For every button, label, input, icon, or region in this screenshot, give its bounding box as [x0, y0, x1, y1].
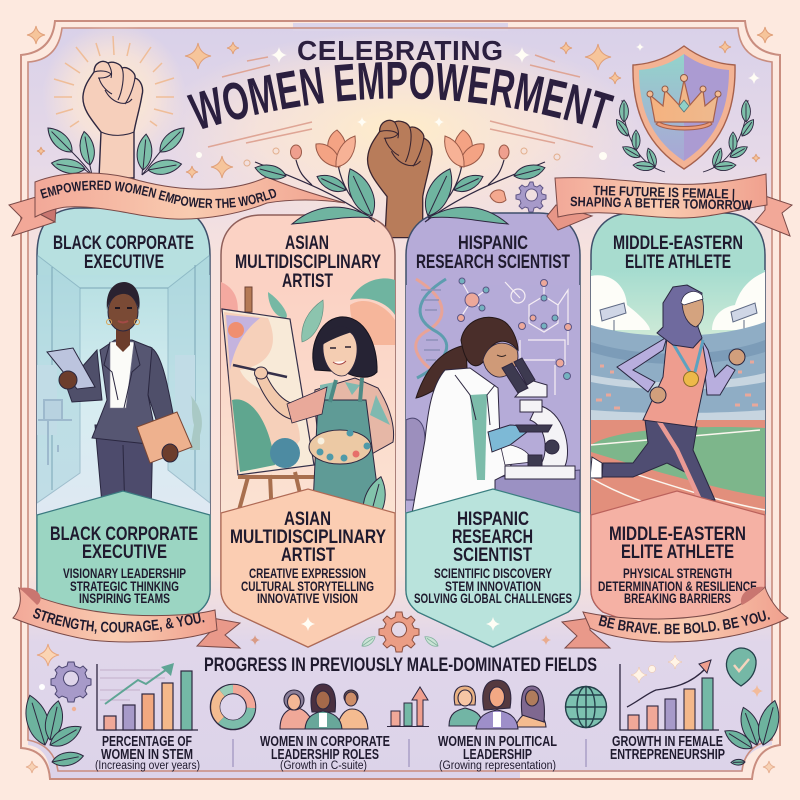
- foreground leaf: [363, 476, 386, 509]
- star right: [541, 635, 551, 645]
- info text card 4: BREAKING BARRIERS: [624, 591, 731, 606]
- card 1 shape: [37, 208, 210, 640]
- ribbon: be brave: [561, 586, 789, 648]
- floodlights: [600, 303, 757, 332]
- icon: laurel leaves left of fist: [43, 123, 189, 177]
- person centre: [483, 680, 511, 710]
- heading card 1: BLACK CORPORATE: [53, 232, 194, 254]
- check: [734, 659, 749, 671]
- title: celebrating: CELEBRATING: [297, 35, 503, 66]
- ribbon: empowered women: [8, 172, 345, 237]
- info text card 3: SCIENTIFIC DISCOVERY: [434, 566, 552, 581]
- artist body: [314, 378, 394, 454]
- label: percentage: PERCENTAGE OF: [102, 734, 192, 750]
- scene: studio: [221, 278, 395, 528]
- apron: [313, 400, 377, 504]
- band: [35, 173, 345, 219]
- tablet: [47, 348, 95, 389]
- info text card 3: HISPANIC: [457, 508, 529, 530]
- fold: [19, 588, 41, 605]
- shirt: [110, 342, 134, 408]
- executive trousers: [94, 424, 153, 498]
- gear top: [516, 182, 546, 212]
- tail right: [197, 618, 240, 648]
- band: [13, 588, 217, 642]
- sparkles and streaks: [27, 26, 773, 178]
- leaf left: [360, 634, 377, 649]
- panel: card 4 athlete: [590, 213, 765, 640]
- leg stripe: [657, 418, 700, 500]
- brush: [233, 365, 287, 377]
- dots: [39, 684, 45, 690]
- icon: corporate leaders: [280, 684, 368, 729]
- arrow head: [161, 663, 174, 676]
- hand: [254, 367, 268, 379]
- chart: donut: [215, 689, 251, 725]
- band: [583, 587, 788, 642]
- axes: [97, 664, 198, 730]
- icon: check bubble: [726, 648, 756, 686]
- info text card 4: PHYSICAL STRENGTH: [623, 566, 732, 581]
- leaf right: [423, 634, 440, 649]
- crown: [647, 74, 721, 130]
- leaves right: [418, 161, 547, 224]
- peach stars: [27, 26, 773, 178]
- trend curve: [627, 668, 706, 707]
- heading card 4: ELITE ATHLETE: [625, 251, 731, 273]
- office furniture: [38, 400, 72, 465]
- label: entrepreneurship: [610, 734, 725, 763]
- heading card 2: MULTIDISCIPLINARY: [235, 251, 381, 273]
- executive jacket: [92, 340, 158, 445]
- heading card 3: [416, 232, 570, 273]
- heading card 2: ASIAN: [285, 232, 329, 254]
- folder: [137, 412, 192, 463]
- icon: shield with crown: [613, 46, 757, 172]
- person right: [336, 709, 368, 729]
- star left: [250, 635, 260, 645]
- heading card 1: EXECUTIVE: [84, 251, 164, 273]
- headband: [681, 292, 703, 305]
- label: corporate: WOMEN IN CORPORATE: [260, 734, 390, 750]
- artist face: [323, 330, 357, 376]
- leaves: [253, 161, 382, 224]
- crowd: [596, 362, 758, 408]
- card 3 shape: [406, 213, 580, 647]
- icon: globe: [566, 686, 606, 728]
- microscope: [502, 358, 575, 479]
- info text card 3: [414, 508, 572, 606]
- info text card 2: CREATIVE EXPRESSION: [249, 566, 366, 581]
- info text card 4: [598, 523, 757, 606]
- studio backdrop shapes: [221, 282, 238, 312]
- divider: [233, 739, 586, 767]
- hijab: [657, 285, 702, 348]
- white sleeve: [500, 443, 532, 465]
- label: entrepreneurship: GROWTH IN FEMALE: [612, 734, 723, 750]
- panel: title tab: [293, 23, 508, 31]
- panel: card 1 executive: [37, 208, 210, 640]
- fold: [36, 208, 56, 222]
- molecules: [461, 282, 568, 395]
- heading card 2: ARTIST: [282, 270, 333, 292]
- stands: [591, 322, 765, 425]
- info text card 1: EXECUTIVE: [82, 541, 167, 563]
- info text card 1: STRATEGIC THINKING: [70, 579, 179, 594]
- info text card 1: BLACK CORPORATE: [50, 523, 198, 545]
- chart: women in STEM: [97, 663, 198, 730]
- icon: sparkle card 3: [486, 617, 500, 631]
- hair: [461, 317, 518, 366]
- right sleeve: [702, 340, 735, 395]
- artist forearm: [255, 376, 291, 420]
- tail: [9, 197, 55, 236]
- panel: card 3 scientist: [406, 213, 580, 647]
- info text card 1: [50, 523, 198, 606]
- icon: lower-left decoration: [20, 644, 91, 768]
- blue glove: [488, 425, 527, 452]
- heading card 2: [235, 232, 381, 292]
- text: THE FUTURE IS FEMALE |: [593, 183, 735, 202]
- ponytail: [416, 345, 467, 398]
- card 4 shape: [591, 213, 765, 640]
- label: political: LEADERSHIP: [463, 747, 532, 763]
- shoe: [590, 457, 602, 478]
- face: [483, 343, 518, 377]
- tail right: [755, 196, 792, 236]
- info text card 4: MIDDLE-EASTERN: [609, 523, 746, 545]
- text: SHAPING A BETTER TOMORROW: [570, 194, 752, 213]
- left sleeve: [617, 337, 667, 392]
- ribbon: strength courage: [12, 587, 242, 649]
- rays: [54, 36, 174, 127]
- card 2 shape: [221, 215, 395, 647]
- bars: [628, 678, 713, 730]
- bud right: [499, 145, 509, 159]
- legs: [602, 420, 715, 500]
- chart sparkles: [631, 655, 682, 683]
- shield right: [684, 54, 729, 161]
- streaks and rings: [208, 55, 593, 147]
- info text card 3: SCIENTIST: [453, 544, 532, 566]
- info text card 3: SOLVING GLOBAL CHALLENGES: [414, 591, 572, 606]
- title glow: [160, 30, 640, 230]
- clouds: [591, 272, 765, 330]
- info panel 2: [221, 489, 395, 647]
- info text card 1: VISIONARY LEADERSHIP: [63, 566, 186, 581]
- tulip: [316, 130, 355, 167]
- info text card 2: [230, 508, 386, 606]
- fist finger lines: [94, 63, 135, 135]
- torso: [643, 337, 707, 427]
- person centre: [311, 684, 336, 712]
- fist glow: [42, 23, 186, 167]
- person right: [515, 712, 546, 727]
- easel top: [245, 287, 252, 312]
- label: corporate: LEADERSHIP ROLES: [271, 747, 379, 763]
- person left: [280, 708, 314, 729]
- track and field: [591, 420, 765, 530]
- hand with tablet: [59, 371, 77, 389]
- tulip right: [445, 130, 484, 167]
- bud lower: [490, 190, 506, 203]
- stems right: [425, 160, 545, 222]
- tail left: [562, 618, 610, 648]
- text: BE BRAVE. BE BOLD. BE YOU.: [598, 610, 770, 634]
- table: [496, 470, 580, 512]
- artist hair back: [313, 317, 377, 377]
- ribbon: the future is female: [547, 174, 792, 236]
- face: [682, 297, 704, 327]
- chart: mini bars: [387, 687, 429, 726]
- text: EMPOWERED WOMEN EMPOWER THE WORLD: [40, 180, 276, 208]
- scene: lab: [406, 278, 580, 525]
- DNA helix: [416, 279, 447, 378]
- info text card 4: ELITE ATHLETE: [621, 541, 734, 563]
- icon: sparkle card 2: [301, 617, 315, 631]
- heading card 4: [613, 232, 743, 273]
- scene: office: [37, 255, 210, 520]
- band: [555, 174, 767, 218]
- fold left: [547, 205, 592, 230]
- arrow head: [699, 660, 711, 673]
- icon: brown fist: [368, 120, 432, 238]
- info text card 3: RESEARCH: [452, 526, 533, 548]
- heading card 3: RESEARCH SCIENTIST: [416, 251, 570, 273]
- fist: [83, 61, 143, 178]
- canvas: [222, 309, 314, 475]
- heading: progress: PROGRESS IN PREVIOUSLY MALE-DOMINATED FIELDS: [204, 654, 597, 676]
- icon: political leaders: [449, 680, 546, 729]
- label: political: (Growing representation): [439, 760, 556, 772]
- heading card 4: MIDDLE-EASTERN: [613, 232, 743, 254]
- hands: [650, 387, 666, 403]
- executive right sleeve: [148, 346, 174, 420]
- medal ribbon and medal: [671, 340, 703, 372]
- blouse patches: [320, 382, 390, 425]
- label: political: [438, 734, 557, 772]
- bars: [104, 671, 192, 730]
- info panel 3: [406, 489, 580, 647]
- icon: raised fist with rays: [42, 23, 186, 178]
- label: percentage: [95, 734, 200, 772]
- star: [37, 644, 59, 666]
- info panel 1: [37, 491, 210, 640]
- bud: [290, 145, 302, 159]
- small gears between cards: [250, 612, 551, 652]
- label: entrepreneurship: ENTREPRENEURSHIP: [610, 747, 725, 763]
- heading card 1: [53, 232, 194, 273]
- info text card 1: INSPIRING TEAMS: [79, 591, 170, 606]
- text: [570, 183, 752, 213]
- shield left: [639, 54, 684, 161]
- white stars: [196, 43, 760, 160]
- easel legs: [238, 472, 314, 508]
- label: percentage: (Increasing over years): [95, 760, 200, 772]
- stems: [255, 160, 375, 222]
- info text card 2: CULTURAL STORYTELLING: [241, 579, 374, 594]
- panel: card 2 artist: [221, 215, 395, 647]
- trend arrow: [105, 667, 170, 704]
- palette: [309, 430, 371, 464]
- painting shapes: [224, 312, 300, 470]
- scene: stadium: [590, 270, 765, 530]
- info panel 4: [591, 491, 765, 640]
- label: political: WOMEN IN POLITICAL: [438, 734, 557, 750]
- axes: [620, 664, 719, 730]
- lapels: [104, 342, 140, 408]
- info text card 3: STEM INNOVATION: [445, 579, 541, 594]
- icon: lower-right leaves: [26, 685, 784, 773]
- icon: right tulip branch: [418, 130, 547, 224]
- neck and head: [116, 330, 130, 352]
- heading card 3: HISPANIC: [458, 232, 528, 254]
- label: percentage: WOMEN IN STEM: [101, 747, 193, 763]
- text: STRENGTH, COURAGE, & YOU.: [33, 608, 204, 634]
- info text card 2: INNOVATIVE VISION: [257, 591, 358, 606]
- gear: [51, 662, 91, 702]
- hand on folder: [162, 444, 178, 462]
- gridlines: [100, 670, 165, 700]
- fold right: [741, 587, 765, 605]
- gear center: [379, 612, 419, 652]
- executive left sleeve: [66, 350, 102, 402]
- label: corporate: [260, 734, 390, 772]
- chart: entrepreneurship: [620, 655, 719, 730]
- icon: left tulip branch: [253, 130, 382, 224]
- info text card 2: MULTIDISCIPLINARY: [230, 526, 386, 548]
- chair: [406, 418, 425, 500]
- shield outer: [633, 46, 735, 169]
- leaves: [20, 692, 85, 768]
- label: corporate: (Growth in C-suite): [280, 760, 367, 772]
- person left: [449, 708, 483, 726]
- info text card 2: ASIAN: [284, 508, 331, 530]
- lab coat: [412, 368, 512, 511]
- title: women empowerment: WOMEN EMPOWERMENT: [186, 62, 614, 129]
- artist sleeve: [287, 387, 327, 423]
- laurels: [613, 100, 757, 172]
- info text card 2: ARTIST: [281, 544, 335, 566]
